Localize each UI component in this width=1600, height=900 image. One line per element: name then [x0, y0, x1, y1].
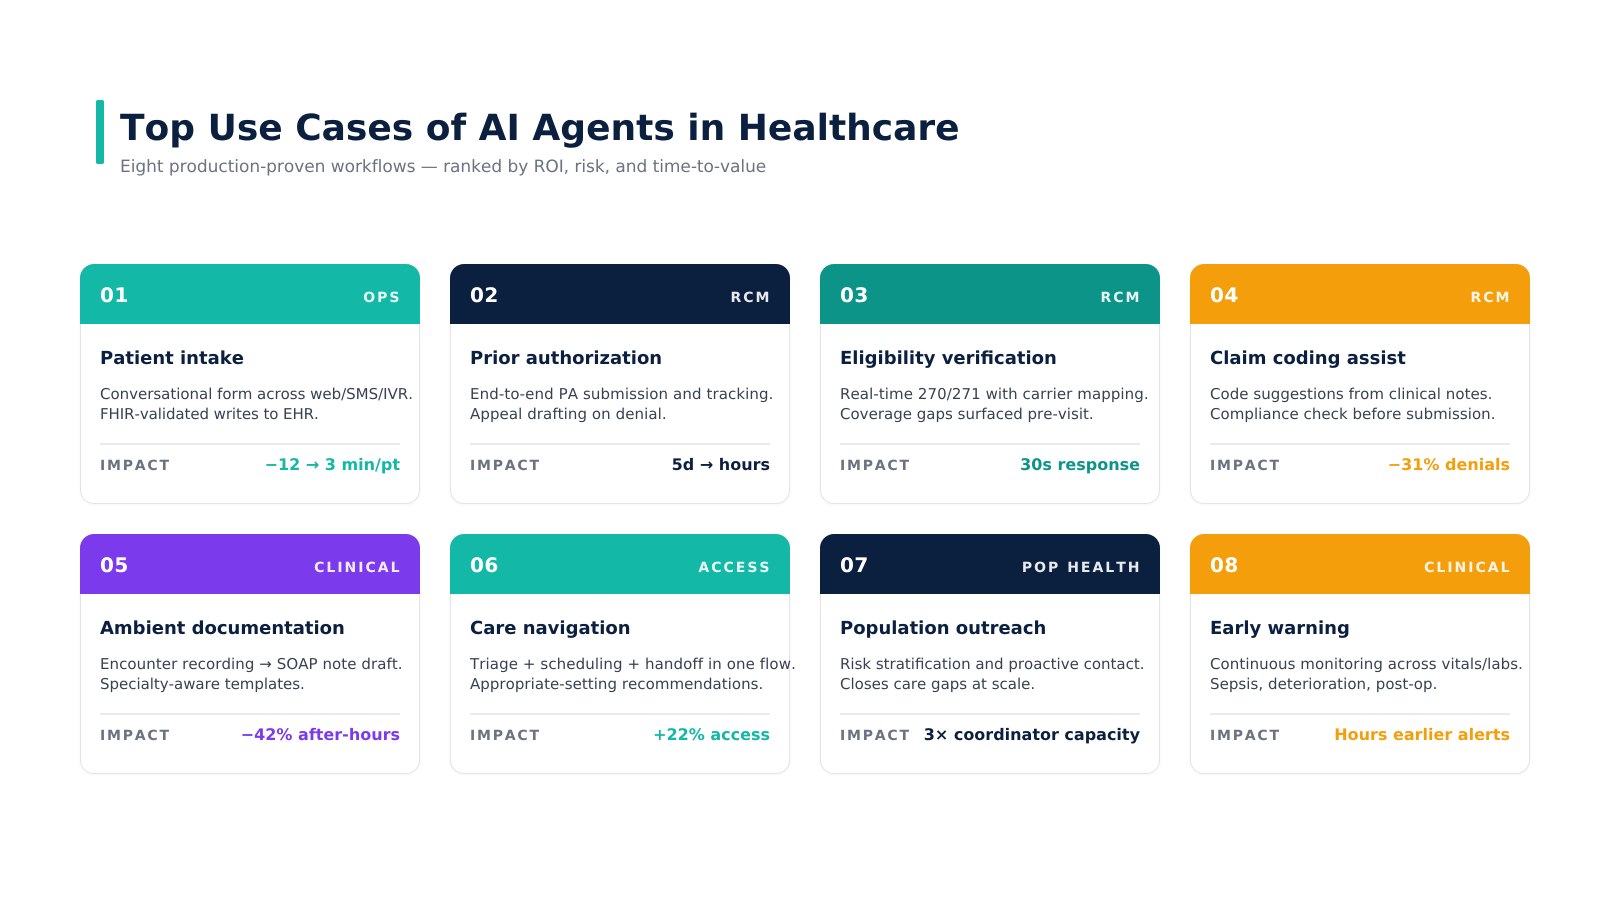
impact value: 3× coordinator capacity [924, 725, 1140, 744]
impact value: Hours earlier alerts [1334, 725, 1510, 744]
card header [1190, 264, 1530, 324]
card title: Prior authorization [470, 348, 662, 369]
card: 01 Patient intake [80, 264, 420, 504]
card description: End-to-end PA submission and tracking. [470, 385, 774, 403]
card title: Claim coding assist [1210, 348, 1406, 369]
card: 06 Care navigation [450, 534, 790, 774]
card header [450, 534, 790, 594]
impact label: IMPACT [840, 728, 911, 744]
card header: 07 [840, 552, 869, 576]
card header [450, 264, 790, 324]
card description: FHIR-validated writes to EHR. [100, 405, 319, 423]
card header: 05 [100, 552, 129, 576]
card header [80, 534, 420, 594]
impact label: IMPACT [470, 728, 541, 744]
impact label: IMPACT [840, 458, 911, 474]
card: 07 Population outreach [820, 534, 1160, 774]
card header: RCM [1100, 290, 1142, 306]
card title: Ambient documentation [100, 618, 345, 639]
card description: Conversational form across web/SMS/IVR. [100, 385, 413, 403]
impact value: −42% after-hours [241, 725, 400, 744]
impact label: IMPACT [100, 458, 171, 474]
card header [1190, 534, 1530, 594]
card description: Coverage gaps surfaced pre-visit. [840, 405, 1094, 423]
card description [470, 385, 774, 423]
card description [100, 655, 403, 693]
card header: OPS [363, 290, 402, 306]
impact value: +22% access [653, 725, 770, 744]
impact value: 5d → hours [672, 455, 770, 474]
card description [470, 655, 796, 693]
card header: 04 [1210, 282, 1239, 306]
card description: Appropriate-setting recommendations. [470, 675, 763, 693]
card: 05 Ambient documentation [80, 534, 420, 774]
card description [1210, 655, 1523, 693]
card header [820, 534, 1160, 594]
card: 04 Claim coding assist [1190, 264, 1530, 504]
card header [820, 264, 1160, 324]
card header: CLINICAL [314, 560, 402, 576]
card header: RCM [730, 290, 772, 306]
impact value: 30s response [1020, 455, 1140, 474]
card header: ACCESS [698, 560, 772, 576]
card header [80, 264, 420, 324]
card header: 01 [100, 282, 129, 306]
card title: Population outreach [840, 618, 1046, 639]
card description: Continuous monitoring across vitals/labs. [1210, 655, 1523, 673]
card description: Risk stratification and proactive contact. [840, 655, 1144, 673]
card description: Compliance check before submission. [1210, 405, 1496, 423]
card description: Sepsis, deterioration, post-op. [1210, 675, 1437, 693]
title accent bar [96, 100, 104, 164]
card description [1210, 385, 1496, 423]
impact label: IMPACT [1210, 728, 1281, 744]
card: 03 Eligibility verification [820, 264, 1160, 504]
card description: Triage + scheduling + handoff in one flow. [470, 655, 796, 673]
card title: Eligibility verification [840, 348, 1057, 369]
card header: 06 [470, 552, 499, 576]
subtitle: Eight production-proven workflows — ranked by ROI, risk, and time-to-value [120, 157, 766, 177]
card title: Patient intake [100, 348, 244, 369]
card description: Closes care gaps at scale. [840, 675, 1035, 693]
card header: 03 [840, 282, 869, 306]
card description: Appeal drafting on denial. [470, 405, 667, 423]
card header: POP HEALTH [1022, 560, 1142, 576]
title: Top Use Cases of AI Agents in Healthcare [120, 108, 960, 149]
card title: Care navigation [470, 618, 631, 639]
impact value: −12 → 3 min/pt [265, 455, 400, 474]
impact label: IMPACT [470, 458, 541, 474]
card: 02 Prior authorization [450, 264, 790, 504]
card header: CLINICAL [1424, 560, 1512, 576]
card header: 08 [1210, 552, 1239, 576]
card description: Real-time 270/271 with carrier mapping. [840, 385, 1149, 403]
card description: Specialty-aware templates. [100, 675, 305, 693]
impact label: IMPACT [1210, 458, 1281, 474]
card title: Early warning [1210, 618, 1350, 639]
card header: RCM [1470, 290, 1512, 306]
card description: Code suggestions from clinical notes. [1210, 385, 1492, 403]
impact value: −31% denials [1388, 455, 1510, 474]
card: 08 Early warning [1190, 534, 1530, 774]
impact label: IMPACT [100, 728, 171, 744]
card description [840, 655, 1144, 693]
card description [100, 385, 413, 423]
card description [840, 385, 1149, 423]
card header: 02 [470, 282, 499, 306]
card description: Encounter recording → SOAP note draft. [100, 655, 403, 673]
